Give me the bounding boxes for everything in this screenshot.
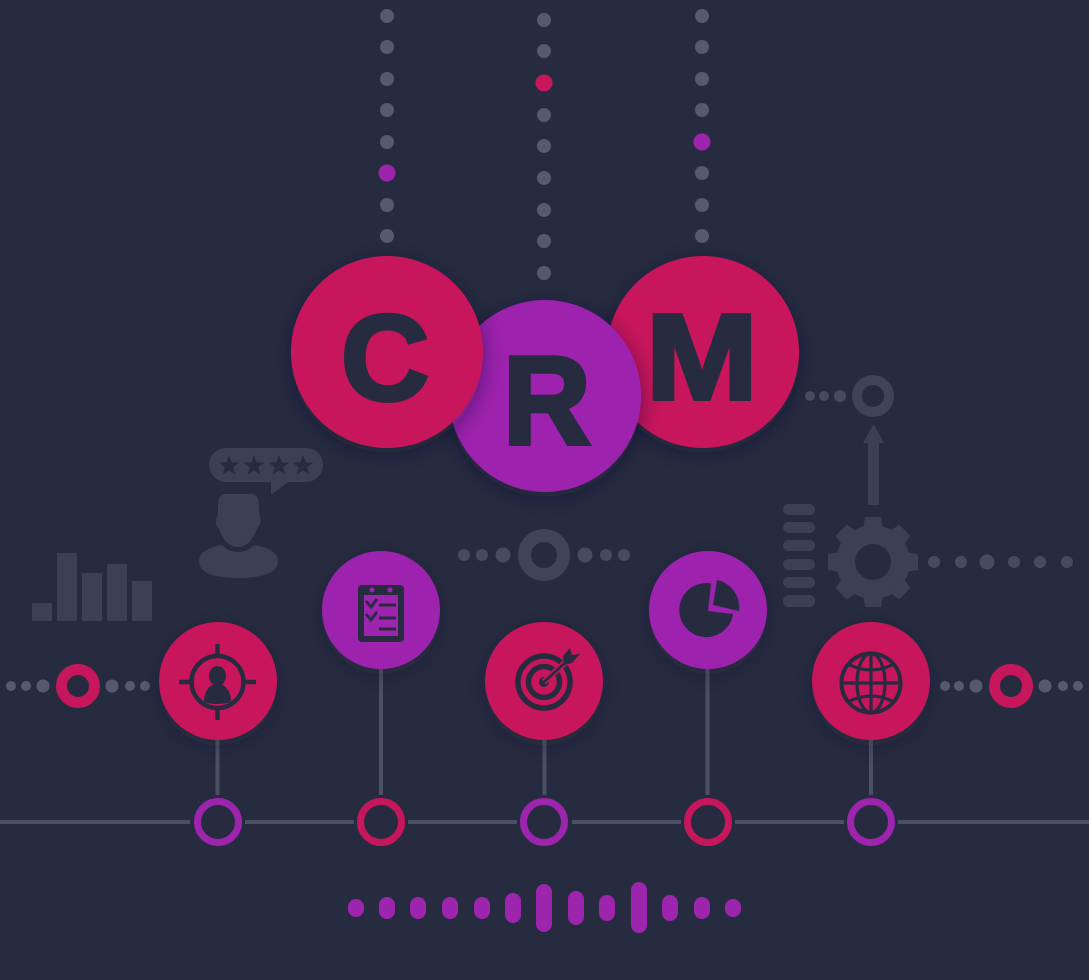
timeline rings (198, 802, 892, 842)
letter C circle: C (341, 290, 429, 426)
icon: pie chart (679, 580, 739, 637)
node: globe (812, 622, 930, 740)
node: checklist (322, 551, 440, 669)
waveform (348, 882, 741, 933)
letter M circle (607, 256, 799, 448)
node: pie chart (649, 551, 767, 669)
icon: checklist clipboard (358, 585, 404, 642)
letter R circle: R (503, 332, 591, 471)
left dotted connector with pink ring (6, 670, 150, 702)
upper right dotted connector with gray ring (805, 380, 889, 412)
letter M circle: M (646, 290, 758, 426)
node: target customer (159, 622, 277, 740)
node: target goal (485, 622, 603, 740)
centre dotted connector with gray ring (458, 536, 630, 574)
vertical stems (218, 665, 871, 795)
dotted column above R (536, 13, 552, 280)
letter R circle (449, 300, 641, 492)
icon: crosshair person (179, 644, 256, 720)
stars (218, 455, 314, 475)
customer silhouette icon (199, 494, 278, 578)
icon: bullseye with arrow (518, 648, 580, 708)
gear dotted connector (928, 554, 1073, 570)
right dotted connector with pink ring (940, 670, 1083, 702)
letter C circle (291, 256, 483, 448)
stacked list bars (783, 504, 815, 607)
background bar chart (32, 553, 152, 621)
timeline line (0, 820, 1089, 824)
dotted column above M (694, 9, 710, 243)
gear icon (828, 517, 918, 607)
arrow up (863, 424, 884, 505)
icon: globe (841, 653, 901, 713)
rating speech bubble (209, 448, 323, 495)
dotted column above C (378, 9, 396, 243)
CRM title circles (291, 256, 799, 492)
